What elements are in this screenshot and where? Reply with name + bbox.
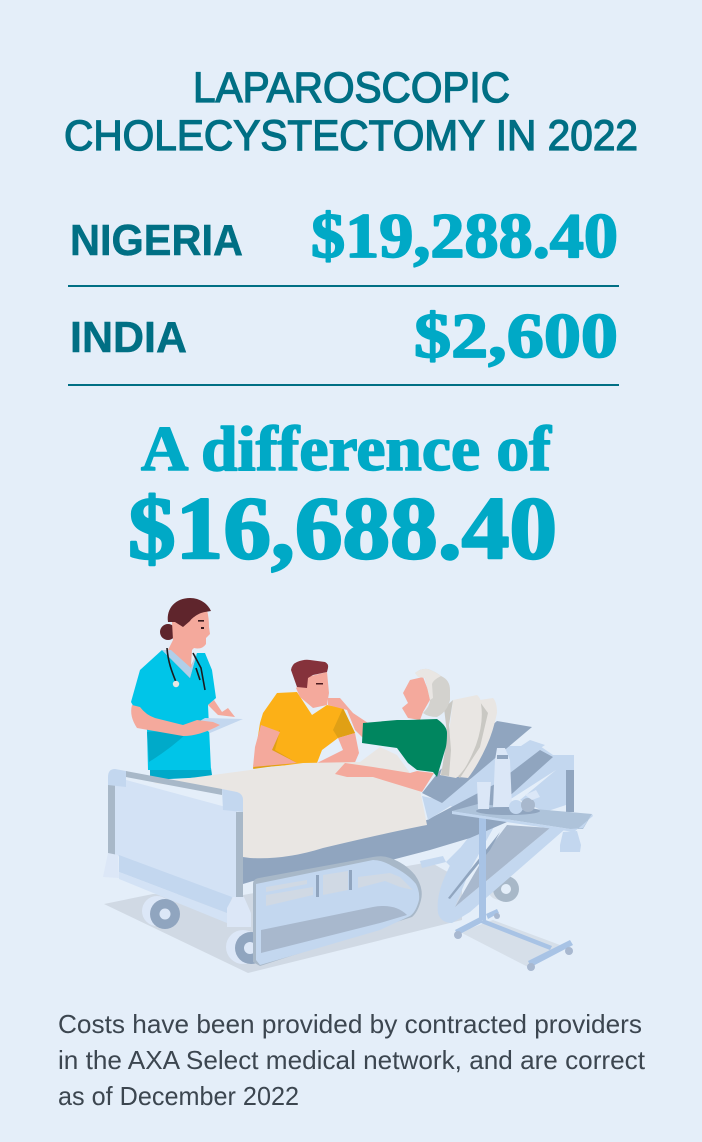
title <box>64 64 638 160</box>
footnote: as of December 2022 <box>58 1081 299 1111</box>
row: India cost: $2,600 <box>414 301 618 371</box>
mattress <box>243 721 553 884</box>
blanket <box>153 747 427 858</box>
pillows <box>440 695 497 778</box>
row: Nigeria cost: NIGERIA <box>70 216 243 265</box>
stethoscope <box>167 648 205 690</box>
footnote: Costs have been provided by contracted providers <box>58 1009 642 1039</box>
title: CHOLECYSTECTOMY IN 2022 <box>64 112 638 160</box>
wheels <box>142 874 519 964</box>
cup and bottle <box>477 782 491 809</box>
difference callout <box>128 414 557 578</box>
visitor <box>253 660 359 769</box>
footnote <box>58 1009 646 1111</box>
row: Nigeria cost <box>70 201 618 271</box>
illustration: hospital bed scene <box>103 598 593 973</box>
foot board <box>103 769 251 927</box>
nurse <box>131 598 243 780</box>
patient <box>153 669 450 858</box>
pears <box>509 800 523 814</box>
title: LAPAROSCOPIC <box>193 64 510 112</box>
row: Nigeria cost: $19,288.40 <box>311 201 618 271</box>
row: India cost: INDIA <box>70 313 187 362</box>
side rail <box>253 856 422 966</box>
over-bed table <box>452 748 593 971</box>
difference callout: A difference of <box>141 414 552 484</box>
difference callout: $16,688.40 <box>128 480 557 578</box>
floor shadow <box>104 862 462 973</box>
footnote: in the AXA Select medical network, and are correct <box>58 1045 646 1075</box>
clipboard <box>198 718 243 733</box>
over-bed table shadow <box>460 920 560 967</box>
row: India cost <box>70 301 618 371</box>
bed head frame <box>420 746 574 923</box>
